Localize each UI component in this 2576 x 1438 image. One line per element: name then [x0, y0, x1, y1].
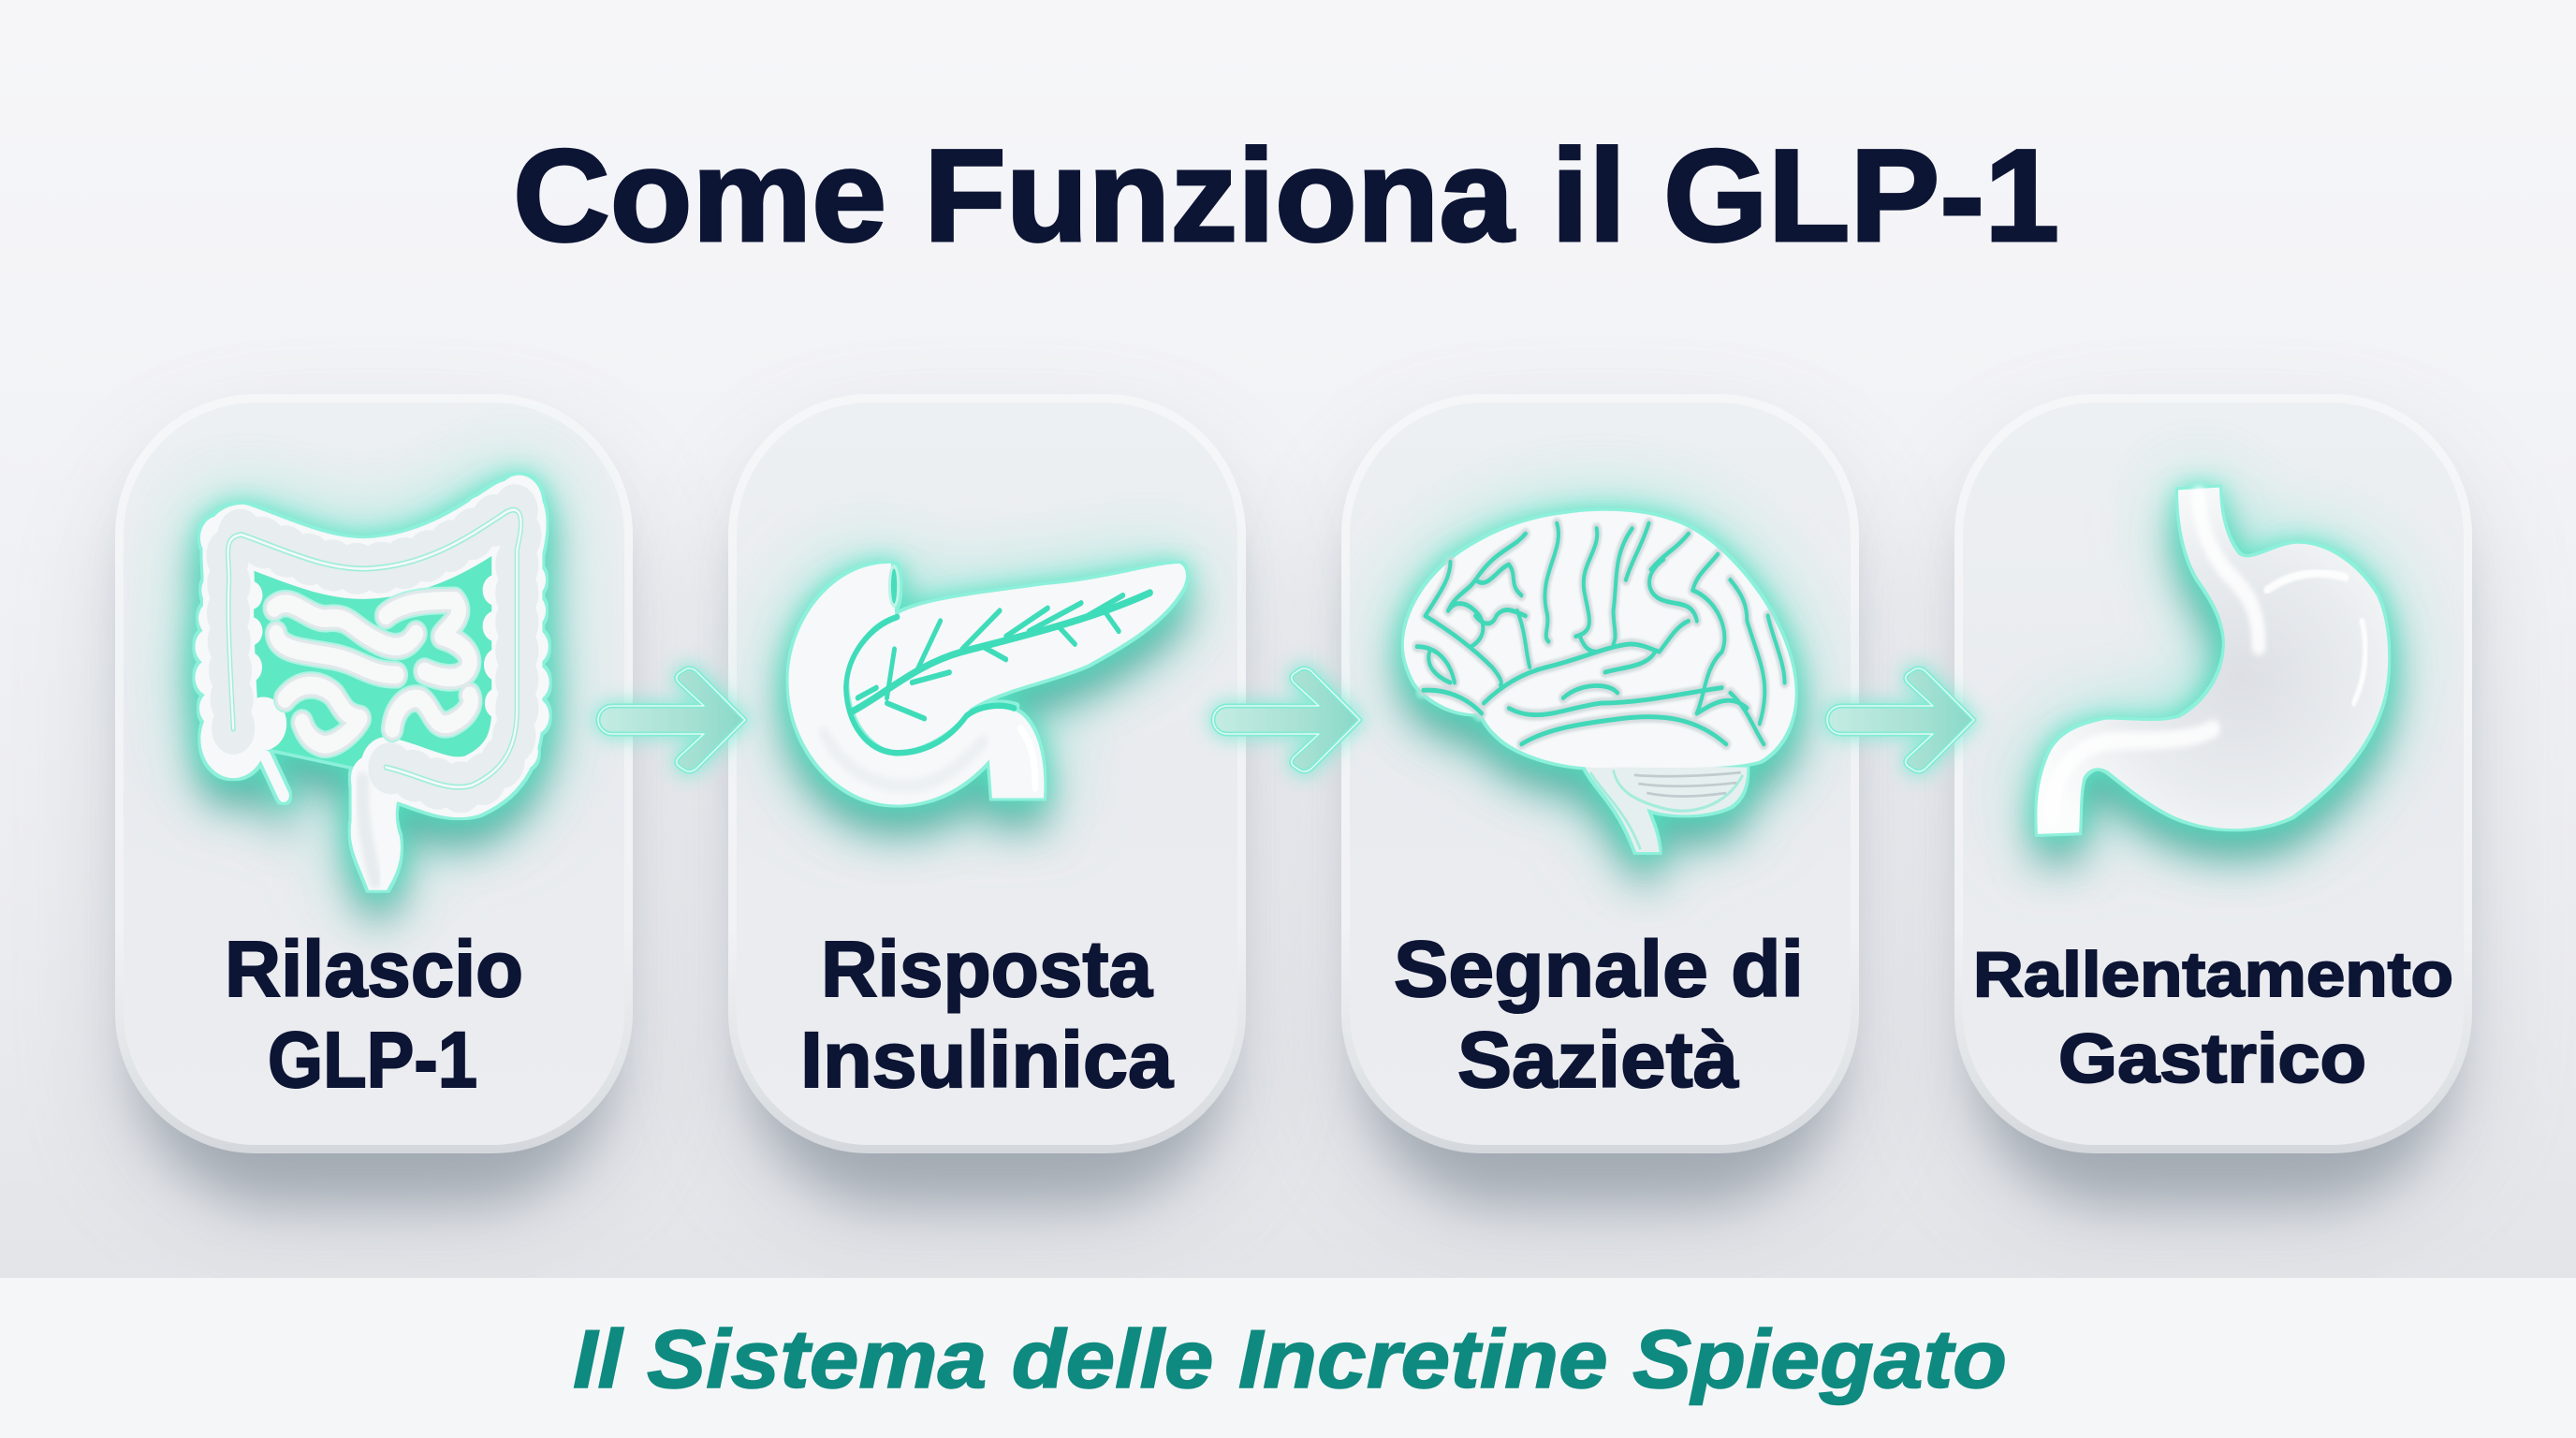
icon: stomach [2037, 488, 2388, 834]
panel: Risposta Insulinica [728, 394, 1246, 1204]
footer band [0, 1278, 2576, 1438]
label [1394, 925, 1804, 1104]
label: Gastrico [2058, 1020, 2366, 1097]
arrow: step 1 to step 2 [598, 668, 745, 771]
icon: brain [1404, 511, 1795, 852]
panel: Segnale di Sazieta [1341, 394, 1859, 1204]
label: GLP-1 [268, 1016, 477, 1104]
subtitle: Il Sistema delle Incretine Spiegato [573, 1313, 2007, 1405]
title: Come Funziona il GLP-1 [513, 122, 2059, 269]
label: Rilascio [225, 925, 523, 1013]
icon: pancreas [789, 564, 1186, 805]
label [1973, 939, 2453, 1097]
label [225, 925, 523, 1104]
arrow: step 3 to step 4 [1827, 668, 1974, 771]
icon: intestine [195, 476, 549, 890]
label: Sazietà [1457, 1016, 1738, 1104]
label: Risposta [821, 925, 1153, 1013]
label: Rallentamento [1973, 939, 2453, 1010]
label [800, 925, 1174, 1104]
label: Insulinica [800, 1016, 1174, 1104]
panel: Rilascio GLP-1 [115, 394, 633, 1204]
label: Segnale di [1394, 925, 1804, 1013]
arrow: step 2 to step 3 [1213, 668, 1360, 771]
panel: Rallentamento Gastrico [1954, 394, 2472, 1204]
